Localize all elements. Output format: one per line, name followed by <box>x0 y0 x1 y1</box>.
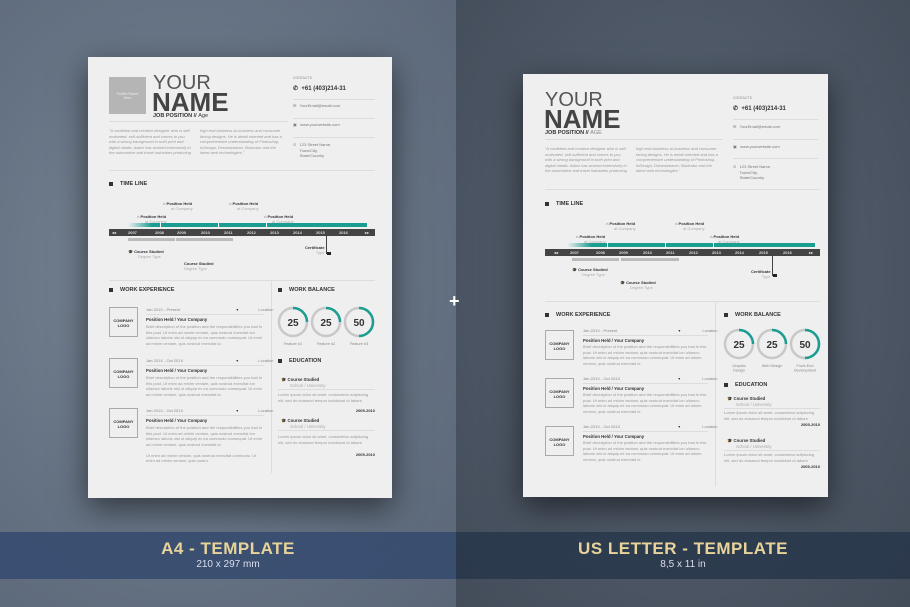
education entries: Lorem ipsum dolor sit amet, consectetur adipiscing elit, sed do eiusmod tempor incididunt ut labore <box>724 452 814 462</box>
timeline chart <box>109 201 375 271</box>
work experience entries <box>109 307 274 463</box>
timeline chart: 2016 <box>783 250 792 255</box>
intro text: "A confident and creative designer who is self-motivated, self-sufficient and comes to you with a strong background in both print and digital media. Adam has worked extensively in the automotive and travel industries producing <box>545 146 627 173</box>
heading: time line: TIME LINE <box>120 181 147 187</box>
donut charts: 25 <box>287 318 299 329</box>
contacts: ✉ YourEmail@email.com <box>733 124 780 129</box>
timeline chart: Degree Type <box>582 272 605 277</box>
timeline chart: ⌂ Position Held <box>264 214 293 219</box>
work experience entries: LOGO <box>118 374 129 379</box>
education entries: 2005-2010 <box>356 408 375 413</box>
panel: US letter resume page: JOB POSITION // AGE <box>545 130 602 136</box>
heading: time line: TIME LINE <box>556 201 583 207</box>
donut charts: 25 <box>320 318 332 329</box>
plus sign: + <box>449 291 460 311</box>
work experience entries: Brief description of the position and the responsibilities you had in this post. Ut enim ad minim veniam, quis nostrud exercitat ion ullamco laboris nisi ut aliquip ex ea commodo consequat. Ut enim ad minim veniam, quis nostrud exercitat io <box>146 375 262 396</box>
timeline chart: 2007 <box>570 250 579 255</box>
work experience entries: COMPANY <box>549 341 570 346</box>
timeline chart: at Company <box>584 239 606 244</box>
panel: US letter resume page: NAME <box>544 104 621 134</box>
heading: work experience: WORK EXPERIENCE <box>556 312 610 318</box>
timeline chart: 2011 <box>224 230 233 235</box>
work experience entries: Brief description of the position and the responsibilities you had in this post. Ut enim ad minim veniam, quis nostrud exercitat ion ullamco laboris nisi ut aliquip ex ea commodo consequat. Ut enim ad minim veniam, quis nostrud exercitat io. <box>583 344 706 366</box>
name heading <box>544 89 621 136</box>
work experience entries: LOGO <box>118 323 129 328</box>
panel: A4 resume page <box>88 57 392 498</box>
donut charts: Front-End <box>797 364 813 368</box>
work experience entries: LOGO <box>554 394 565 399</box>
work experience entries: COMPANY <box>549 437 570 442</box>
education entries: School / University <box>290 383 326 388</box>
timeline chart: at Company <box>683 226 705 231</box>
timeline chart: 🎓 Course Studied <box>620 280 656 285</box>
timeline chart: at Company <box>718 239 740 244</box>
work experience entries: Position Held / Your Company <box>583 434 644 439</box>
education entries: Lorem ipsum dolor sit amet, consectetur adipiscing elit, sed do eiusmod tempor incididunt ut labore <box>278 392 368 402</box>
timeline chart: 2008 <box>596 250 605 255</box>
donut charts: 50 <box>799 340 811 351</box>
education entries: Lorem ipsum dolor sit amet, consectetur adipiscing elit, sed do eiusmod tempor incididunt ut labore <box>278 434 368 444</box>
heading: work experience: WORK EXPERIENCE <box>120 287 174 293</box>
timeline chart: 2012 <box>247 230 256 235</box>
contacts: ⊙ 123 Street Name, <box>733 164 771 169</box>
timeline chart: Course Studied <box>184 261 214 266</box>
work experience entries <box>545 328 718 462</box>
education entries: 🎓 Course Studied <box>727 396 765 401</box>
contacts: Town/City, <box>300 148 318 152</box>
education entries: School / University <box>736 402 772 407</box>
timeline chart: Degree Type <box>138 254 161 259</box>
donut charts <box>724 328 820 372</box>
contacts: ✆ +61 (403)214-31 <box>293 86 346 92</box>
panel: US letter resume page: YOUR <box>545 89 603 111</box>
contacts: ▣ www.yourwebsite.com <box>733 144 780 149</box>
timeline chart: 2016 <box>339 230 348 235</box>
timeline chart: 2015 <box>316 230 325 235</box>
donut charts: 50 <box>353 318 365 329</box>
timeline chart: ⌂ Position Held <box>576 234 605 239</box>
donut charts: Graphic <box>732 364 746 368</box>
education entries: 2005-2010 <box>356 452 375 457</box>
intro text: "A confident and creative designer who is self-motivated, self-sufficient and comes to you with a strong background in both print and digital media. Adam has worked extensively in the automotive and travel industries producing <box>109 128 191 155</box>
timeline chart: Certificate <box>751 269 771 274</box>
timeline chart: 🎓 Course Studied <box>572 267 608 272</box>
contacts: ✉ YourEmail@email.com <box>293 103 340 108</box>
timeline chart <box>545 221 820 290</box>
timeline chart: 2010 <box>643 250 652 255</box>
timeline chart: at Company <box>272 219 294 224</box>
donut charts: Feature #3 <box>350 342 368 346</box>
timeline chart: Type <box>762 274 771 279</box>
timeline chart: at Company <box>237 206 259 211</box>
timeline chart: 2011 <box>666 250 675 255</box>
heading: work balance: WORK BALANCE <box>289 287 335 293</box>
timeline chart: ⌂ Position Held <box>710 234 739 239</box>
timeline chart: 2009 <box>619 250 628 255</box>
timeline chart: ⌂ Position Held <box>229 201 258 206</box>
profile picture: Profile Picture <box>117 92 138 96</box>
caption subtitle US letter: 8,5 x 11 in <box>660 559 706 570</box>
timeline chart: ▸▸ <box>809 250 813 255</box>
donut charts: 25 <box>766 340 778 351</box>
timeline chart: 🎓 Course Studied <box>128 249 164 254</box>
work experience entries: Jan 201X - Oct 201X ▾ Location <box>146 408 273 413</box>
education entries: School / University <box>290 424 326 429</box>
timeline chart: ◂◂ <box>112 230 116 235</box>
contacts: State/Country <box>740 175 764 180</box>
timeline chart: 2013 <box>270 230 279 235</box>
caption band: A4 <box>0 532 456 579</box>
education entries <box>724 396 820 469</box>
panel: A4 resume page: JOB POSITION // Age <box>153 113 208 119</box>
caption title A4: A4 - TEMPLATE <box>161 539 295 558</box>
contacts: Town/City, <box>740 170 758 174</box>
donut charts: Feature #1 <box>284 342 302 346</box>
work experience entries: LOGO <box>554 442 565 447</box>
name heading <box>152 72 229 119</box>
caption title US letter: US LETTER - TEMPLATE <box>578 539 788 558</box>
timeline chart: ⌂ Position Held <box>163 201 192 206</box>
work experience entries: Position Held / Your Company <box>146 418 207 423</box>
timeline chart: Type <box>316 250 325 255</box>
timeline chart: 2009 <box>177 230 186 235</box>
work experience entries: Jan 201X - Oct 201X ▾ Location <box>583 376 717 381</box>
timeline chart: at Company <box>145 219 167 224</box>
education entries: School / University <box>736 444 772 449</box>
panel: A4 resume page: high end business-to-business and consumer facing designs. He is detail oriented and has a comprehensive understanding of Photoshop, InDesign, Dreamweaver, Illustrator and the latest web technologies." <box>200 128 282 155</box>
timeline chart: 2013 <box>712 250 721 255</box>
timeline chart: 2014 <box>735 250 744 255</box>
timeline chart: 2008 <box>155 230 164 235</box>
work experience entries: Brief description of the position and the responsibilities you had in this post. Ut enim ad minim veniam, quis nostrud exercitat ion ullamco laboris nisi ut aliquip ex ea commodo consequat. Ut enim ad minim veniam, quis nostrud exercitat io <box>146 324 262 346</box>
heading: education: EDUCATION <box>289 358 321 364</box>
donut charts: 25 <box>733 340 745 351</box>
timeline chart: 2007 <box>128 230 137 235</box>
contacts: ⊙ 123 Street Name, <box>293 142 331 147</box>
education entries: Lorem ipsum dolor sit amet, consectetur adipiscing elit, sed do eiusmod tempor incididunt ut labore <box>724 410 814 420</box>
caption subtitle A4: 210 x 297 mm <box>196 559 260 570</box>
work experience entries: Position Held / Your Company <box>583 386 644 391</box>
work experience entries: COMPANY <box>113 419 134 424</box>
donut charts: Web Design <box>762 364 782 368</box>
work experience entries: LOGO <box>118 424 129 429</box>
profile picture: Here <box>124 96 131 100</box>
education entries: 🎓 Course Studied <box>727 438 765 443</box>
timeline chart: 2015 <box>759 250 768 255</box>
work experience entries: COMPANY <box>113 318 134 323</box>
work experience entries: Brief description of the position and the responsibilities you had in this post. Ut enim ad minim veniam, quis nostrud exercitat ion ullamco laboris nisi ut aliquip ex ea commodo consequat. Ut enim ad minim veniam, quis nostrud exercitat io. <box>583 392 706 414</box>
panel: A4 resume page: NAME <box>152 87 229 117</box>
timeline chart: at Company <box>614 226 636 231</box>
donut charts: Design <box>733 368 745 372</box>
contacts: CONTACTS <box>733 96 752 100</box>
work experience entries: Ut enim ad minim veniam, quis nostrud exercitat commodo. Ut enim ad minim veniam, quis nostru <box>146 452 256 463</box>
timeline chart: ◂◂ <box>554 250 558 255</box>
work experience entries: Position Held / Your Company <box>146 317 207 322</box>
donut charts <box>278 306 374 346</box>
education entries: 2005-2010 <box>801 422 820 427</box>
work experience entries: Jan 201X - Oct 201X ▾ Location <box>146 358 273 363</box>
contacts: ▣ www.yourwebsite.com <box>293 122 340 127</box>
profile picture <box>109 77 146 114</box>
work experience entries: Brief description of the position and the responsibilities you had in this post. Ut enim ad minim veniam, quis nostrud exercitat ion ullamco laboris nisi ut aliquip ex ea commodo consequat. Ut enim ad minim veniam, quis nostrud exercitat io. <box>583 440 706 462</box>
education entries: 🎓 Course Studied <box>281 377 319 382</box>
caption band: US letter <box>456 532 910 579</box>
contacts <box>733 96 818 180</box>
work experience entries: Position Held / Your Company <box>146 368 207 373</box>
donut charts: Feature #2 <box>317 342 335 346</box>
education entries: 2005-2010 <box>801 464 820 469</box>
timeline chart: ▸▸ <box>365 230 369 235</box>
work experience entries: Jan 201X - Present ▾ Location <box>146 307 274 312</box>
contacts <box>293 76 375 158</box>
timeline chart: ⌂ Position Held <box>137 214 166 219</box>
panel: A4 resume page: YOUR <box>153 72 211 94</box>
work experience entries: Jan 201X - Present ▾ Location <box>583 328 718 333</box>
timeline chart: 2012 <box>689 250 698 255</box>
timeline chart: at Company <box>171 206 193 211</box>
timeline chart: ⌂ Position Held <box>675 221 704 226</box>
panel: US letter resume page <box>523 74 828 497</box>
contacts: CONTACTS <box>293 76 312 80</box>
work experience entries: Jan 201X - Oct 201X ▾ Location <box>583 424 717 429</box>
timeline chart: Degree Type <box>184 266 207 271</box>
education entries <box>278 377 375 457</box>
heading: work balance: WORK BALANCE <box>735 312 781 318</box>
donut charts: Development <box>794 368 817 372</box>
contacts: State/Country <box>300 153 324 158</box>
work experience entries: COMPANY <box>549 389 570 394</box>
heading: education: EDUCATION <box>735 382 767 388</box>
work experience entries: COMPANY <box>113 369 134 374</box>
work experience entries: Position Held / Your Company <box>583 338 644 343</box>
timeline chart: 2010 <box>201 230 210 235</box>
timeline chart: Certificate <box>305 245 325 250</box>
timeline chart: Degree Type <box>630 285 653 290</box>
timeline chart: ⌂ Position Held <box>606 221 635 226</box>
contacts: ✆ +61 (403)214-31 <box>733 106 786 112</box>
work experience entries: LOGO <box>554 346 565 351</box>
timeline chart: 2014 <box>293 230 302 235</box>
work experience entries: Brief description of the position and the responsibilities you had in this post. Ut enim ad minim veniam, quis nostrud exercitat ion ullamco laboris nisi ut aliquip ex ea commodo consequat. Ut enim ad minim veniam, quis nostrud exercitat io <box>146 425 262 446</box>
education entries: 🎓 Course Studied <box>281 418 319 423</box>
panel: US letter resume page: high end business-to-business and consumer facing designs. He is detail oriented and has a comprehensive understanding of Photoshop, InDesign, Dreamweaver, Illustrator and the latest web technologies." <box>636 146 718 173</box>
